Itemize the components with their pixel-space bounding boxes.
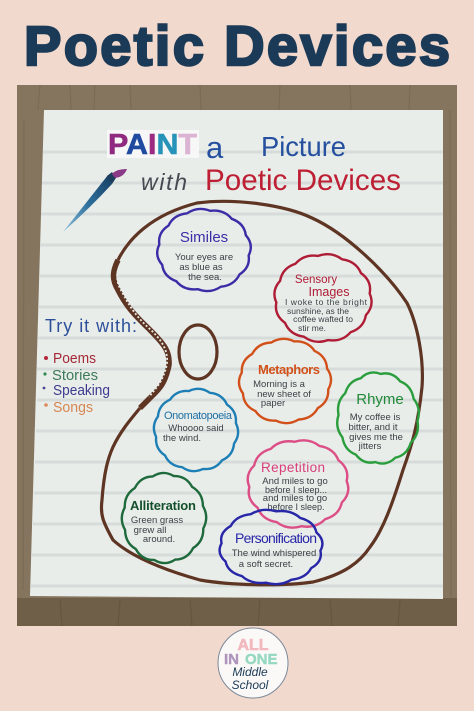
cloud: Metaphors: new sheet of [257,389,311,400]
cloud: Repetition [245,438,351,530]
cloud: Personification: a soft secret. [239,559,293,570]
cloud: Sensory Images: Sensory [295,274,337,286]
heading: PAINT a Picture with Poetic Devices: a [206,130,224,165]
cloud: Alliteration: Alliteration [130,498,196,513]
cloud: Personification: Personification [235,530,317,546]
logo: All In One Middle School: ALL [237,637,269,654]
cloud: Personification [215,507,327,587]
logo: All In One Middle School [218,628,288,698]
cloud: Metaphors: paper [261,398,285,409]
wood backdrop [17,85,457,626]
palette thumb hole [179,325,217,379]
cloud: Repetition: Repetition [261,460,325,475]
cloud: Sensory Images: stir me. [298,323,326,333]
cloud: Rhyme: My coffee is [350,412,401,423]
left list: Try it with: Songs [53,400,93,416]
logo: All In One Middle School: ONE [245,651,278,668]
cloud: Onomatopoeia: the wind. [163,433,201,444]
palette outline [101,201,422,585]
cloud: Alliteration [114,464,214,572]
palette neck [114,260,169,408]
heading: PAINT a Picture with Poetic Devices: PAINT [108,129,197,161]
logo: All In One Middle School: IN [224,651,239,668]
cloud: Similes: as blue as [179,262,223,273]
cloud: Rhyme [335,370,421,466]
cloud: Alliteration: Green grass [131,515,183,526]
cloud: Onomatopoeia [148,383,244,477]
heading: PAINT a Picture with Poetic Devices [107,129,401,197]
cloud: Onomatopoeia: Onomatopoeia [164,410,233,422]
heading: PAINT a Picture with Poetic Devices: with [141,169,187,195]
logo: All In One Middle School: Middle [232,665,268,679]
heading: PAINT a Picture with Poetic Devices: Poetic Devices [205,164,401,197]
title: Poetic Devices [24,14,450,77]
cloud: Sensory Images: Images [308,285,350,299]
left list: Try it with: Try it with: [45,316,137,336]
cloud: Rhyme: Rhyme [356,391,404,408]
cloud: Repetition: and miles to go [263,493,327,504]
icon: paintbrush [63,169,127,232]
cloud: Repetition: And miles to go [262,476,328,487]
left list: Try it with: Speaking [53,382,110,399]
chart paper [30,110,443,599]
cloud: Personification: The wind whispered [232,548,316,559]
left list: Try it with: Poems [53,350,96,367]
cloud: Onomatopoeia: Whoooo said [168,423,224,434]
cloud: Repetition: before I sleep... [265,485,327,495]
cloud: Rhyme: jitters [358,441,382,452]
cloud: Similes [152,204,256,296]
cloud: Sensory Images: I woke to the bright [285,297,368,307]
cloud: Similes: Similes [180,229,228,246]
cloud: Alliteration: around. [143,534,175,545]
left list: Try it with: Stories [52,368,98,384]
logo: All In One Middle School: School [232,678,269,692]
cloud: Rhyme: bitter, and it [348,422,398,433]
cloud: Sensory Images [270,250,376,346]
heading: PAINT a Picture with Poetic Devices: Picture [261,131,346,162]
cloud: Similes: Your eyes are [175,252,233,263]
cloud: Alliteration: grew all [134,525,166,536]
cloud: Metaphors: Morning is a [253,379,306,390]
left list: Try it with [43,316,137,416]
cloud: Repetition: before I sleep. [267,502,325,512]
cloud: Metaphors [231,332,339,430]
cloud: Rhyme: gives me the [349,432,403,443]
cloud: Sensory Images: sunshine, as the [287,306,349,316]
cloud: Metaphors: Metaphors [258,362,320,377]
cloud: Similes: the sea. [188,272,222,283]
cloud: Sensory Images: coffee wafted to [293,314,353,324]
